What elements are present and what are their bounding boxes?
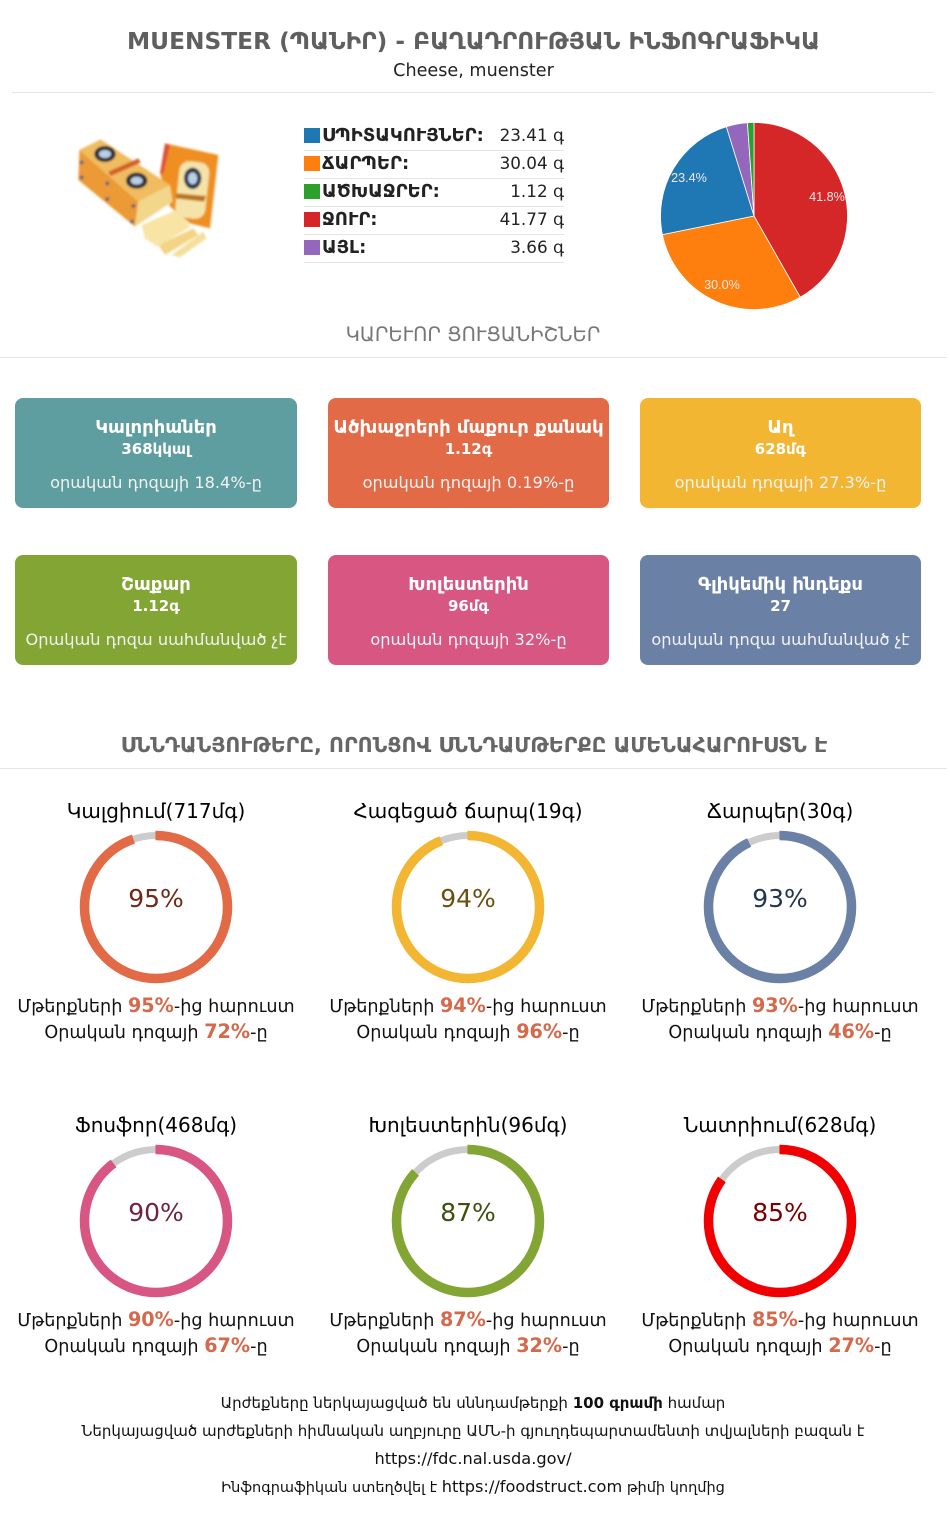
card: salt: օրական դոզայի 27.3%-ը xyxy=(675,473,886,492)
title: MUENSTER (ՊԱՆԻՐ) - ԲԱՂԱԴՐՈՒԹՅԱՆ ԻՆՖՈԳՐԱՖԻԿԱ xyxy=(127,28,820,55)
legend row: water xyxy=(304,206,564,235)
card: calories: 368կկալ xyxy=(121,440,191,458)
card: cholesterol: 96մգ xyxy=(448,597,489,615)
card: sugar: 1.12գ xyxy=(132,597,180,615)
legend row: other xyxy=(304,234,564,263)
nutrient: cholesterol xyxy=(329,1113,607,1357)
card: glycemic index xyxy=(640,555,921,665)
card: cholesterol: Խոլեստերին xyxy=(408,574,529,595)
card: calories: օրական դոզայի 18.4%-ը xyxy=(50,473,262,492)
section heading: richest nutrients: ՍՆՆԴԱՆՅՈՒԹԵՐԸ, ՈՐՈՆՑՈՎ ՍՆՆԴԱՄԹԵՐՔԸ ԱՄԵՆԱՀԱՐՈՒՍՏՆ Է xyxy=(121,733,827,757)
card: net carbohydrates: 1.12գ xyxy=(445,440,492,458)
section heading: key indicators: ԿԱՐԵՒՈՐ ՑՈՒՑԱՆԻՇՆԵՐ xyxy=(346,323,600,346)
nutrient: phosphorus xyxy=(17,1113,295,1357)
footer notes: Արժեքները ներկայացված են սննդամթերքի 100 գրամի համար xyxy=(221,1394,725,1412)
card: net carbohydrates: օրական դոզայի 0.19%-ը xyxy=(363,473,574,492)
nutrient: saturated fat: 94% xyxy=(440,884,496,913)
footer notes xyxy=(81,1394,865,1496)
nutrient: phosphorus: 90% xyxy=(128,1198,184,1227)
nutrient: phosphorus: Ֆոսֆոր(468մգ) xyxy=(75,1113,237,1137)
legend row: carbohydrates: 1.12 գ xyxy=(510,181,564,201)
pie chart: 30.0% xyxy=(704,278,740,292)
card: glycemic index: 27 xyxy=(770,597,791,615)
legend row: fats: 30.04 գ xyxy=(500,153,564,173)
footer notes: Ներկայացված արժեքների հիմնական աղբյուրը ԱՄՆ-ի գյուղդեպարտամենտի տվյալների բազան է xyxy=(81,1422,865,1440)
nutrient: sodium xyxy=(641,1113,919,1357)
nutrient: phosphorus: Մթերքների 90%-ից հարուստ xyxy=(17,1308,295,1331)
nutrient: cholesterol: 87% xyxy=(440,1198,496,1227)
nutrient: calcium: Օրական դոզայի 72%-ը xyxy=(44,1020,268,1043)
nutrient: calcium: 95% xyxy=(128,884,184,913)
nutrient: cholesterol: Օրական դոզայի 32%-ը xyxy=(356,1334,580,1357)
nutrient: saturated fat: Օրական դոզայի 96%-ը xyxy=(356,1020,580,1043)
nutrient: sodium: Մթերքների 85%-ից հարուստ xyxy=(641,1308,919,1331)
legend row: carbohydrates xyxy=(304,178,564,207)
nutrient: sodium: Նատրիում(628մգ) xyxy=(684,1113,876,1137)
card: salt: 628մգ xyxy=(755,440,806,458)
card: calories xyxy=(15,398,297,508)
legend row: proteins: ՍՊԻՏԱԿՈՒՅՆԵՐ: xyxy=(322,125,484,146)
footer notes: https://fdc.nal.usda.gov/ xyxy=(374,1449,572,1468)
nutrient: fats: 93% xyxy=(752,884,808,913)
legend row: water: ՋՈՒՐ: xyxy=(322,209,378,230)
card: cholesterol xyxy=(328,555,609,665)
nutrient: saturated fat: Մթերքների 94%-ից հարուստ xyxy=(329,994,607,1017)
legend row: water: 41.77 գ xyxy=(500,209,564,229)
nutrient: saturated fat: Հագեցած ճարպ(19գ) xyxy=(353,799,582,823)
card: salt: Աղ xyxy=(767,417,794,438)
legend row: other: ԱՅԼ: xyxy=(322,237,366,258)
nutrient legend table xyxy=(304,125,564,263)
nutrient: fats: Ճարպեր(30գ) xyxy=(707,799,853,823)
nutrient: sodium: Օրական դոզայի 27%-ը xyxy=(668,1334,892,1357)
pie chart: 41.8% xyxy=(809,190,845,204)
card: net carbohydrates: Ածխաջրերի մաքուր քանակ xyxy=(333,417,604,438)
nutrient: saturated fat xyxy=(329,799,607,1043)
legend row: proteins xyxy=(304,122,564,151)
card: sugar xyxy=(15,555,297,665)
nutrient: calcium xyxy=(17,799,295,1043)
legend row: carbohydrates: ԱԾԽԱՋՐԵՐ: xyxy=(322,181,440,202)
card: sugar: Շաքար xyxy=(121,574,191,595)
card: cholesterol: օրական դոզայի 32%-ը xyxy=(370,630,567,649)
card: glycemic index: օրական դոզա սահմանված չէ xyxy=(651,630,910,649)
card: glycemic index: Գլիկեմիկ ինդեքս xyxy=(698,574,863,595)
nutrient: phosphorus: Օրական դոզայի 67%-ը xyxy=(44,1334,268,1357)
nutrient: calcium: Մթերքների 95%-ից հարուստ xyxy=(17,994,295,1017)
card: net carbohydrates xyxy=(328,398,609,508)
legend row: other: 3.66 գ xyxy=(510,237,564,257)
card: salt xyxy=(640,398,921,508)
card: calories: Կալորիաներ xyxy=(95,417,217,438)
image: muenster cheese package xyxy=(76,138,220,258)
nutrient: fats: Օրական դոզայի 46%-ը xyxy=(668,1020,892,1043)
legend row: fats xyxy=(304,150,564,179)
legend row: fats: ՃԱՐՊԵՐ: xyxy=(322,153,409,174)
legend row: proteins: 23.41 գ xyxy=(500,125,564,145)
nutrient: calcium: Կալցիում(717մգ) xyxy=(67,799,245,823)
pie chart: 23.4% xyxy=(671,171,707,185)
nutrient: cholesterol: Խոլեստերին(96մգ) xyxy=(369,1113,567,1137)
pie chart xyxy=(660,122,848,310)
nutrient: sodium: 85% xyxy=(752,1198,808,1227)
footer notes: Ինֆոգրաֆիկան ստեղծվել է https://foodstruct.com թիմի կողմից xyxy=(221,1477,725,1496)
subtitle: Cheese, muenster xyxy=(393,61,554,81)
nutrient: fats: Մթերքների 93%-ից հարուստ xyxy=(641,994,919,1017)
card: sugar: Օրական դոզա սահմանված չէ xyxy=(25,630,287,649)
nutrient: fats xyxy=(641,799,919,1043)
nutrient: cholesterol: Մթերքների 87%-ից հարուստ xyxy=(329,1308,607,1331)
